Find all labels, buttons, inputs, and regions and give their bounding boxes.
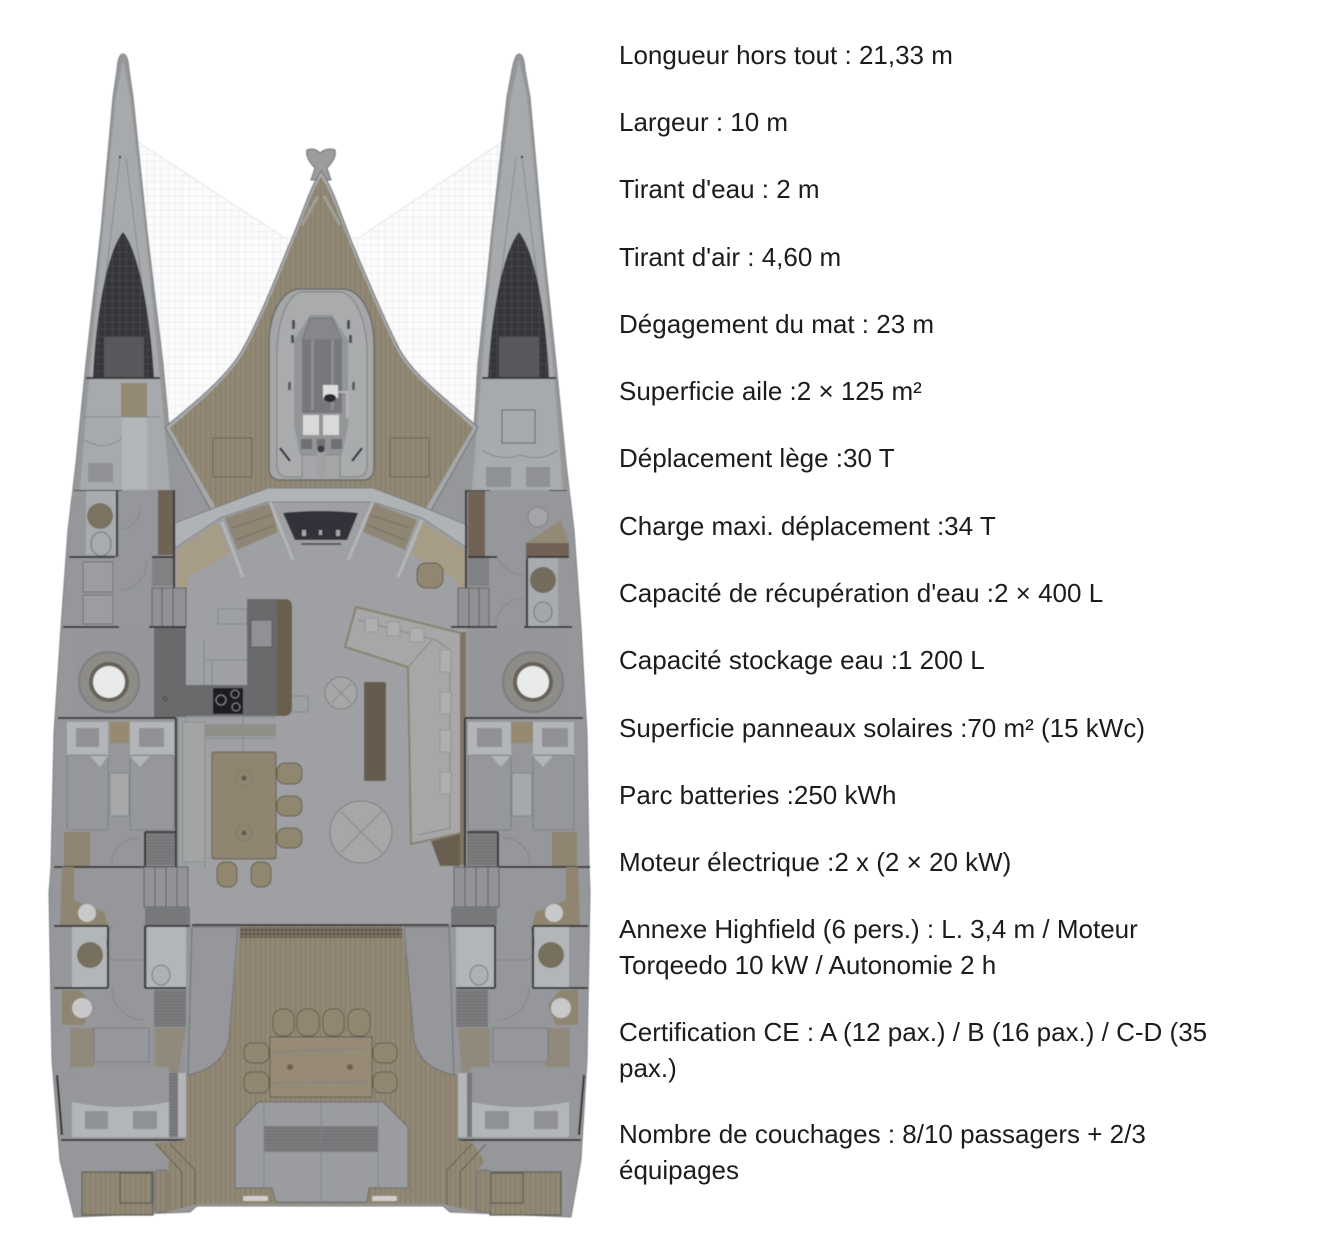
port porthole cabin	[76, 630, 154, 717]
hull silhouette	[49, 54, 590, 1217]
central cabin walls	[54, 718, 590, 867]
spec: CE certification: Certification CE : A (12 pax.) / B (16 pax.) / C-D (35	[619, 1017, 1207, 1047]
spec: battery bank: Parc batteries :250 kWh	[619, 780, 896, 810]
saloon arch	[175, 488, 467, 548]
dining bench	[178, 717, 276, 867]
spec: water recovery: Capacité de récupération d'eau :2 × 400 L	[619, 578, 1103, 608]
starboard bow hatch	[482, 232, 556, 378]
spec: light displacement: Déplacement lège :30 T	[619, 443, 895, 473]
ottomans	[325, 677, 392, 863]
foredeck	[165, 171, 478, 514]
aft lounge bench	[235, 1102, 408, 1202]
swim platform port	[82, 1170, 168, 1215]
starboard bunk cabin	[466, 722, 577, 866]
dining table	[212, 752, 276, 859]
forepeak starboard	[467, 410, 567, 491]
spec: tender: Torqeedo 10 kW / Autonomie 2 h	[619, 950, 996, 980]
port bunk cabin	[64, 722, 175, 866]
spec: berths: équipages	[619, 1155, 739, 1185]
tender on deck	[269, 289, 374, 480]
spec: beam: Largeur : 10 m	[619, 107, 788, 137]
deck plan of the catamaran	[48, 53, 592, 1218]
port aft cabins	[54, 867, 190, 1027]
spec: CE certification: pax.)	[619, 1053, 677, 1083]
aft cockpit deck	[154, 925, 486, 1212]
saloon floor	[176, 502, 467, 925]
spec: CE certification	[619, 1017, 1207, 1083]
spec: berths: Nombre de couchages : 8/10 passagers + 2/3	[619, 1119, 1146, 1149]
starboard aft cabins	[451, 867, 588, 1027]
spec: electric motors: Moteur électrique :2 x (2 × 20 kW)	[619, 847, 1011, 877]
spec: water storage: Capacité stockage eau :1 200 L	[619, 645, 985, 675]
bow crossbeam	[307, 149, 335, 180]
spec: tender: Annexe Highfield (6 pers.) : L. 3,4 m / Moteur	[619, 914, 1138, 944]
port upper cabins	[63, 490, 186, 627]
spec: max load displacement: Charge maxi. déplacement :34 T	[619, 511, 996, 541]
port bow hatch	[86, 232, 160, 378]
spec: mast clearance: Dégagement du mat : 23 m	[619, 309, 934, 339]
spec: draught: Tirant d'eau : 2 m	[619, 174, 820, 204]
port stern cabin	[57, 1028, 186, 1140]
forepeak port	[74, 383, 174, 491]
spec: tender	[619, 914, 1138, 980]
helm console	[283, 511, 358, 545]
saloon helm seats	[177, 502, 465, 627]
spec: solar panels: Superficie panneaux solaires :70 m² (15 kWc)	[619, 713, 1145, 743]
aft table and chairs	[244, 1009, 397, 1097]
lounge sofa	[345, 607, 466, 866]
starboard stern cabin	[456, 1028, 584, 1140]
spec: air draught: Tirant d'air : 4,60 m	[619, 242, 841, 272]
swim platform starboard	[477, 1170, 561, 1215]
dining stools	[217, 763, 302, 887]
kitchen island	[154, 599, 308, 717]
starboard porthole cabin	[468, 630, 568, 717]
spec: wing area: Superficie aile :2 × 125 m²	[619, 376, 922, 406]
spec: overall length: Longueur hors tout : 21,33 m	[619, 40, 953, 70]
saloon low table	[364, 682, 386, 781]
side passages	[188, 927, 454, 1075]
trampoline nets	[135, 140, 505, 432]
spec: berths	[619, 1119, 1146, 1185]
starboard upper cabins	[451, 490, 572, 627]
